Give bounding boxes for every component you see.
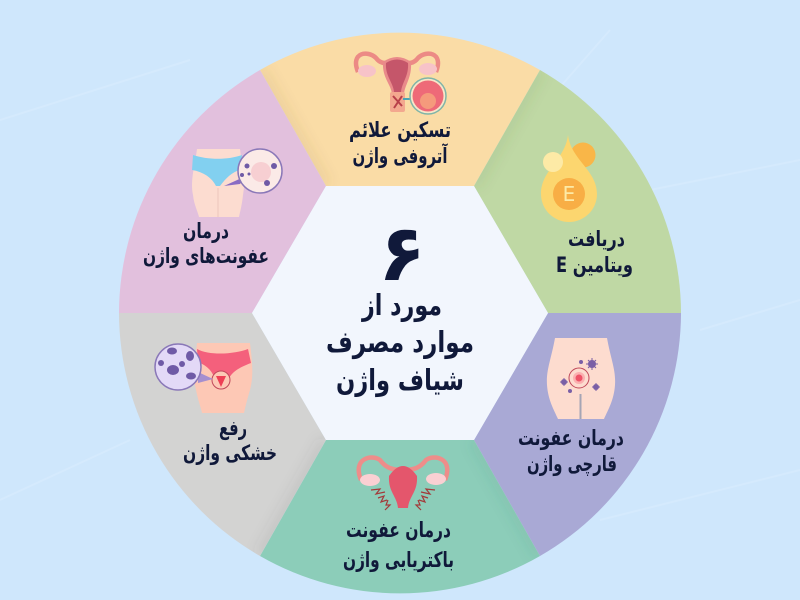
- center heading: [326, 288, 474, 397]
- label: bacterial infection: [343, 518, 454, 572]
- panel: atrophy segment: [260, 32, 540, 186]
- label: vitamin E: دریافت: [568, 227, 625, 251]
- panel: vaginal infections segment: [115, 60, 330, 316]
- icon: vitamin E drop: [541, 135, 597, 222]
- center heading: مورد از: [360, 288, 442, 322]
- label: atrophy: [349, 118, 451, 168]
- label: fungal infection: قارچی واژن: [527, 452, 617, 476]
- label: vitamin E: [556, 227, 633, 277]
- icon: fungal infection: [547, 338, 615, 419]
- label: dryness: رفع: [219, 416, 247, 440]
- icon: uterus pain: [359, 457, 447, 510]
- panel: bacterial infection segment: [255, 436, 545, 596]
- center number: ۶: [378, 209, 426, 299]
- label: vitamin E: ویتامین E: [556, 253, 633, 277]
- label: vaginal infections: درمان: [183, 219, 229, 243]
- center hexagon: [252, 186, 548, 440]
- icon: uterus atrophy: [356, 54, 446, 114]
- center heading: موارد مصرف: [326, 325, 474, 359]
- label: bacterial infection: درمان عفونت: [346, 518, 451, 542]
- label: fungal infection: [518, 426, 624, 476]
- icon: dryness: [155, 343, 252, 413]
- label: dryness: [183, 416, 277, 465]
- label: atrophy: آتروفی واژن: [352, 143, 448, 168]
- panel: vitamin E segment: [474, 70, 681, 313]
- label: vaginal infections: [143, 219, 269, 268]
- center heading: شیاف واژن: [336, 363, 464, 397]
- label: vaginal infections: عفونت‌های واژن: [143, 244, 269, 268]
- panel: fungal infection segment: [470, 310, 685, 560]
- panel: wheel segments: [115, 30, 685, 596]
- label: fungal infection: درمان عفونت: [518, 426, 624, 450]
- icon: vaginal infection: [192, 149, 282, 217]
- label: atrophy: تسکین علائم: [349, 118, 451, 142]
- label: dryness: خشکی واژن: [183, 441, 277, 465]
- panel: dryness segment: [115, 310, 330, 560]
- icon: vitamin E drop: E: [563, 182, 575, 206]
- label: bacterial infection: باکتریایی واژن: [343, 548, 454, 572]
